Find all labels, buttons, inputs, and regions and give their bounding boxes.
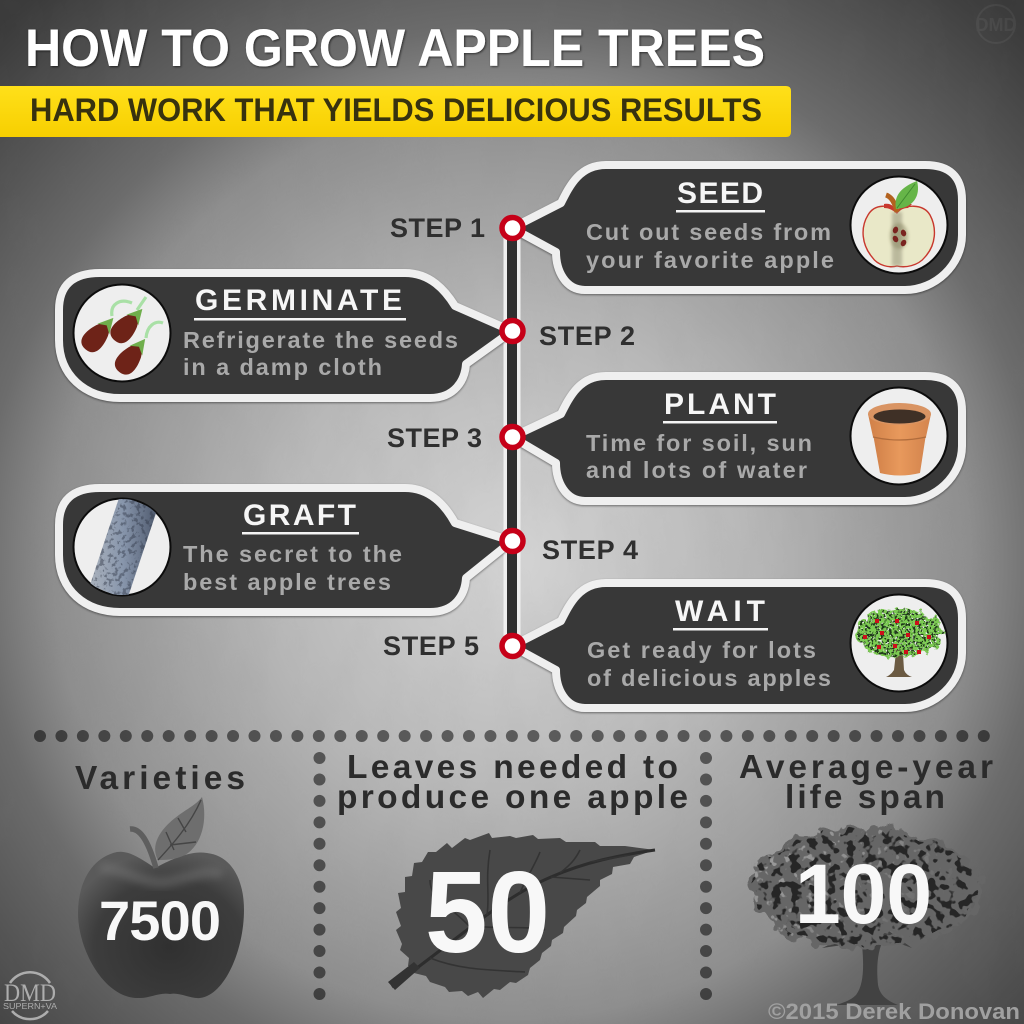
icon: fruit tree <box>850 594 948 692</box>
stat: life span <box>739 749 993 1005</box>
logo: DMD Supernova <box>3 972 58 1019</box>
subtitle banner <box>0 86 791 137</box>
description: germinate <box>183 327 458 380</box>
copyright: ©2015 Derek Donovan <box>768 999 1020 1024</box>
heading: wait: WAIT <box>675 595 765 628</box>
underline: seed <box>676 210 765 212</box>
underline: plant <box>663 421 777 424</box>
title: HOW TO GROW APPLE TREES <box>25 19 765 78</box>
step 3 marker: STEP 3 <box>387 423 482 453</box>
description: seed: Cut out seeds from <box>586 219 831 245</box>
watermark: top right logo: DMD <box>976 15 1016 35</box>
description: plant: Time for soil, sun <box>586 430 812 456</box>
description: graft <box>183 541 402 595</box>
panel: graft <box>59 488 512 612</box>
icon: grafted branch <box>74 495 170 600</box>
description: wait <box>587 637 831 691</box>
description: graft: best apple trees <box>183 569 391 595</box>
step 3 marker <box>387 423 523 453</box>
label: life span <box>739 749 993 816</box>
step 5 marker: STEP 5 <box>383 631 479 661</box>
value: 7500: 7500 <box>99 889 221 952</box>
description: wait: Get ready for lots <box>587 637 816 663</box>
description: germinate: in a damp cloth <box>183 354 382 380</box>
description: seed <box>586 219 834 273</box>
description: plant <box>586 430 812 483</box>
stat: varieties <box>75 760 245 998</box>
step 1 marker: STEP 1 <box>390 213 485 243</box>
label: varieties: Varieties <box>75 760 245 797</box>
label: leaves: Leaves needed to <box>347 749 678 786</box>
panel: germinate <box>59 273 512 398</box>
value: 100: 100 <box>795 847 932 941</box>
description: seed: your favorite apple <box>586 247 834 273</box>
subtitle banner: HARD WORK THAT YIELDS DELICIOUS RESULTS <box>30 92 762 128</box>
logo: DMD Supernova: DMD <box>4 980 56 1007</box>
panel: plant <box>512 376 962 501</box>
panel: seed <box>512 165 962 290</box>
underline: graft <box>242 532 359 534</box>
underline: wait <box>673 628 768 630</box>
heading: plant: PLANT <box>664 388 776 421</box>
label: life span: life span <box>785 779 945 816</box>
icon: apple <box>78 797 244 998</box>
logo: DMD Supernova: SUPERN+VA <box>3 1002 58 1011</box>
label: leaves <box>337 749 688 816</box>
timeline spine <box>504 228 520 646</box>
underline: germinate <box>194 318 406 320</box>
label: life span: Average-year <box>739 749 993 786</box>
step 5 marker <box>383 631 523 661</box>
step 4 marker: STEP 4 <box>542 535 638 565</box>
icon: leaf <box>388 833 655 998</box>
description: germinate: Refrigerate the seeds <box>183 327 458 353</box>
icon: halved apple <box>850 176 948 274</box>
icon: sprouting seeds <box>74 284 170 382</box>
icon: gray tree <box>749 826 983 1005</box>
description: plant: and lots of water <box>586 457 807 483</box>
step 2 marker: STEP 2 <box>539 321 635 351</box>
panel: wait <box>512 583 962 708</box>
description: wait: of delicious apples <box>587 665 831 691</box>
description: graft: The secret to the <box>183 541 402 567</box>
watermark: top right logo <box>976 5 1016 43</box>
heading: graft: GRAFT <box>243 499 356 532</box>
heading: germinate: GERMINATE <box>195 284 402 317</box>
label: leaves: produce one apple <box>337 779 688 816</box>
heading: seed: SEED <box>677 177 763 210</box>
value: 50: 50 <box>425 847 550 977</box>
icon: terracotta pot <box>850 388 948 484</box>
step 4 marker <box>502 530 638 565</box>
stat: leaves <box>337 749 688 998</box>
